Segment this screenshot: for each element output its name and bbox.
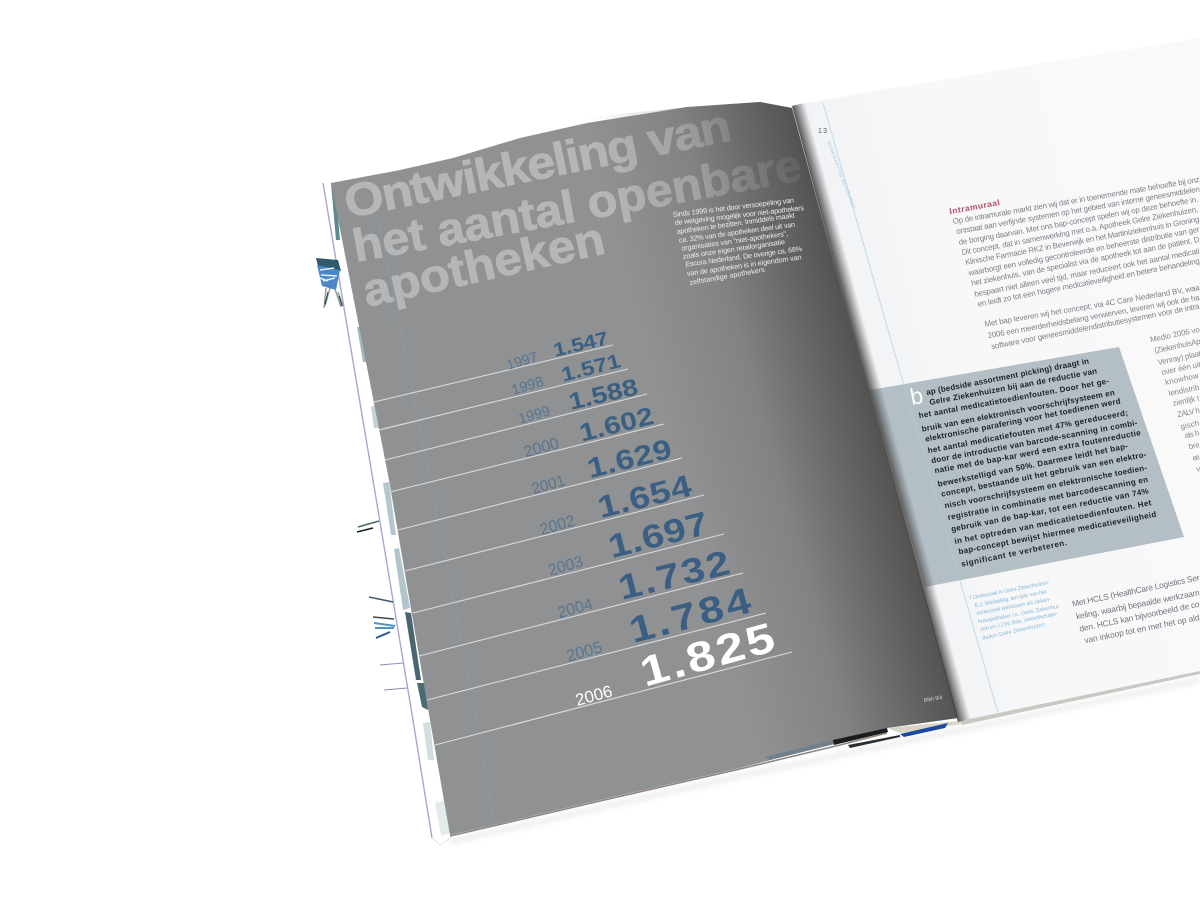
chart rules [374,345,792,745]
callout text: in het optreden van medicatietoedienfouten. Het [954,498,1152,546]
stray tabs sticking out of the pages [357,521,407,690]
intro text: ca. 32% van de apotheken deel uit van [678,220,795,245]
HCLS paragraph [1071,572,1200,645]
faint blue rule on grey page [378,215,493,820]
vertical running header: ontwikkeling apotheken [825,141,857,210]
year labels: 2001 [530,472,567,498]
heading: Intramuraal: Intramuraal [949,197,1001,216]
right page bottom edge [960,671,1200,725]
right page body text: 2006 een meerderheidsbelang verwierven, leveren wij ook de ha [987,293,1200,340]
photo fragment: blue speckled [316,258,343,308]
right column text: lendistrib [1168,383,1200,398]
intro text: van de apotheken is in eigendom van [686,252,802,278]
year labels: 2002 [538,513,577,539]
right page body text: waarborgt een volledig gecontroleerde en beheerste distributie van ger [967,225,1200,278]
title: Ontwikkeling van [340,100,735,228]
callout text: elektronische parafering voor het toedienen werd [924,396,1121,444]
callout text: bap-concept bewijst hiermee medicatieveiligheid [958,510,1157,556]
intro text: Escura Nederland. De overige ca. 68% [685,244,803,269]
callout text [908,356,1157,569]
right page [795,38,1200,725]
year labels: 1999 [517,403,552,428]
purple page edge line [323,183,432,838]
year values: 1.697 [604,504,712,565]
year labels: 2004 [555,595,595,622]
year values: 1.784 [625,579,756,651]
callout text: Gelre Ziekenhuizen bij aan de reductie van [929,366,1098,407]
callout text: significant te verbeteren. [960,538,1068,569]
right page body text: software voor geneesmiddelendistributiesystemen voor de intra [990,301,1200,351]
HCLS paragraph: keling, waarbij bepaalde werkzaam [1075,587,1200,621]
callout text: concept, bestaande uit het gebruik van een elektro- [940,450,1147,499]
callout text: gebruik van de bap-kar, tot een reductie van 74% [950,486,1149,534]
right page body text: ontstaat aan verfijnde systemen op het gebied van interne geneesmiddelen [955,185,1200,236]
footnote: theker Gelre Ziekenhuizen [982,622,1045,642]
footnote: onderzoek werkzaam als zieken- [976,597,1052,617]
intro text: organisaties van "niet-apothekers", [681,229,789,253]
right page body text: Met bap leveren wij het concept; via 4C Care Nederland BV, waa [984,283,1200,329]
footnote: E.J. Wesseling, ten tijde van het [974,589,1047,609]
right page body text: Dit concept, dat in samenwerking met o.a. Apotheek Gelre Ziekenhuizen, [961,205,1199,257]
right column text: (ZiekenhuisAp [1154,337,1200,355]
right column text: Medio 2006 vo [1149,325,1200,344]
year labels [505,349,614,710]
intro text: zoals onze eigen retailorganisatie [682,237,785,261]
left page, dark grey [331,102,958,835]
right column text [1149,325,1200,474]
right page body text: Op de intramurale markt zien wij dat er in toenemende mate behoefte bij onz [952,175,1200,226]
year labels: 1998 [510,374,546,399]
year labels: 2006 [573,682,614,710]
intro text: de wetgeving mogelijk voor niet-apothekers [674,203,805,227]
bottom page stack [450,721,962,836]
small page label on grey page: Bfsh 9/4 [923,695,943,704]
year labels: 2003 [546,553,585,580]
callout text: het aantal medicatietoedienfouten. Door het ge- [918,376,1110,420]
callout text: registratie in combinatie met barcodescanning en [947,475,1149,522]
callout text: natie met de bap-kar werd een extra foutenreductie [934,428,1142,475]
right page body text [952,175,1200,351]
intro text: Sinds 1999 is het door versoepeling van [672,195,794,219]
callout text: het aantal medicatiefouten met 47% gereduceerd; [927,408,1129,455]
callout text: bewerkstelligd van 50%. Daarmee leidt het bap- [937,441,1129,489]
grey-blue callout panel [870,347,1184,587]
right column text: knowhow [1164,371,1200,387]
year values: 1.588 [566,375,641,415]
intro text [672,195,805,287]
right page body text: en leidt zo tot een hogere medicatieveiligheid en betere behandeling [977,256,1200,309]
footnote [968,580,1061,642]
callout text: door de introductie van barcode-scanning in combi- [930,418,1138,465]
intro text: apotheken te bezitten. Inmiddels maakt [676,211,795,236]
callout text: ap (bedside assortment picking) draagt in [925,356,1090,397]
year values: 1.654 [594,469,695,525]
callout text: nisch voorschrijfsysteem en elektronische toedien- [944,463,1148,510]
year values: 1.629 [584,433,675,484]
blue margin rule [823,103,998,713]
year values [551,328,780,695]
HCLS paragraph: Met HCLS (HealthCare Logistics Ser [1071,572,1200,609]
year values: 1.602 [576,401,656,447]
chart: number of pharmacies per year [374,328,792,745]
right page body text: de borging daarvan. Met ons bap-concept spelen wij op deze behoefte in. [958,195,1199,247]
title [340,100,806,317]
right column text: als h [1184,428,1200,440]
right column text: zienlijk t [1172,393,1200,408]
title: het aantal openbare [348,139,806,272]
year values: 1.571 [559,349,623,386]
spine shadow on grey page [560,102,958,772]
title: apotheken [358,213,609,317]
year values: 1.547 [551,328,610,361]
soft shadow under the magazine [450,680,1200,842]
fragments along the page edge [331,183,450,836]
intro text: zelfstandige apothekers [689,265,766,287]
footnote: zen en J.J.W. Ros, ziekenhuisapo- [980,611,1059,633]
right column text: gisch [1180,419,1200,431]
left page edge stack and printed fragments [316,183,452,845]
right page body text: het ziekenhuis, van de specialist via de apotheek tot aan de patiënt. D [970,235,1200,288]
year labels: 2005 [564,638,604,666]
year labels: 2000 [522,435,561,461]
year labels: 1997 [505,349,540,374]
faint outer line of page bottom [432,837,452,845]
drop cap b: b [908,382,925,410]
callout text: bruik van een elektronisch voorschrijfsysteem en [921,388,1116,434]
year values: 1.732 [614,543,734,608]
right column text: ZALV h [1176,406,1200,419]
shadow on right page at spine [792,101,980,722]
year values: 1.825 [635,613,780,695]
HCLS paragraph: den. HCLS kan bijvoorbeeld de co [1078,599,1200,634]
right page body text: Klinische Farmacie RKZ in Beverwijk en het Martiniziekenhuis in Groning [964,215,1200,267]
right page body text: bespaart niet alleen veel tijd, maar reduceert ook het aantal medicati [974,246,1200,299]
HCLS paragraph: van inkoop tot en met het op ald [1083,612,1200,645]
page number: 13 [818,128,827,135]
footnote: 7 Onderzoek in Gelre Ziekenhuizen: [968,580,1050,602]
footnote: huisapotheker i.o., Gelre Ziekenhui- [978,604,1061,625]
